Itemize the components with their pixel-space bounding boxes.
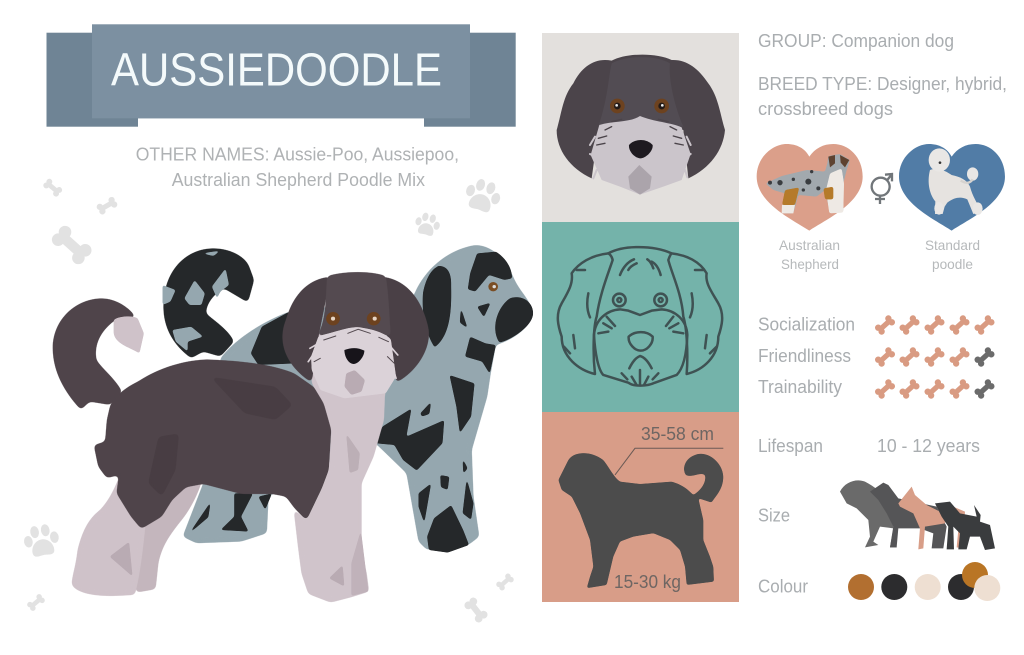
head fur	[557, 55, 725, 178]
rating: trainability	[758, 377, 996, 400]
decorative bones and paws	[22, 175, 515, 624]
panel: line art face	[542, 222, 739, 412]
height label: 35-58 cm	[641, 424, 714, 444]
breed captions: Shepherd	[781, 256, 839, 272]
title: AUSSIEDOODLE	[111, 44, 442, 96]
weight label: 15-30 kg	[614, 572, 681, 592]
panel: face portrait	[542, 33, 739, 222]
lifespan: 10 - 12 years	[877, 436, 980, 456]
size silhouettes	[840, 480, 995, 550]
size: Size	[758, 506, 790, 526]
lifespan	[758, 436, 980, 456]
breed captions: poodle	[932, 256, 973, 272]
group and breed type text	[758, 31, 1007, 119]
title banner	[46, 24, 516, 127]
size	[758, 480, 995, 550]
colour swatches	[758, 562, 1000, 601]
group and breed type text: crossbreed dogs	[758, 99, 893, 119]
lifespan: Lifespan	[758, 436, 823, 456]
colour swatches: Colour	[758, 577, 808, 597]
height pointer	[615, 448, 723, 475]
gender symbol	[872, 174, 892, 204]
eyes	[610, 99, 625, 113]
other names text: OTHER NAMES: Aussie-Poo, Aussiepoo,	[136, 145, 459, 165]
eyes	[613, 294, 626, 306]
other names text	[136, 145, 459, 190]
breed captions: Australian	[779, 237, 840, 253]
fur strokes	[564, 259, 717, 353]
rating: friendliness: Friendliness	[758, 346, 851, 366]
head outline	[608, 247, 722, 374]
rating: socialization: Socialization	[758, 315, 855, 335]
rating: friendliness	[758, 346, 996, 368]
other names text: Australian Shepherd Poodle Mix	[172, 170, 425, 190]
breed captions: Standard	[925, 237, 980, 253]
breed captions	[779, 237, 980, 272]
back dog: blue merle	[163, 245, 533, 553]
parent breeds	[757, 144, 1005, 231]
panel: size and weight silhouette	[542, 412, 739, 602]
muzzle outline	[594, 309, 687, 386]
heart: australian shepherd	[757, 144, 863, 231]
group and breed type text: GROUP: Companion dog	[758, 31, 954, 51]
muzzle	[591, 116, 691, 195]
front dog: chocolate and cream	[53, 272, 429, 603]
rating: trainability: Trainability	[758, 377, 842, 397]
group and breed type text: BREED TYPE: Designer, hybrid,	[758, 74, 1007, 94]
heart: standard poodle	[899, 144, 1005, 231]
rating: socialization	[758, 314, 996, 336]
illustration: two dogs	[53, 245, 533, 603]
dog silhouette	[558, 453, 723, 588]
